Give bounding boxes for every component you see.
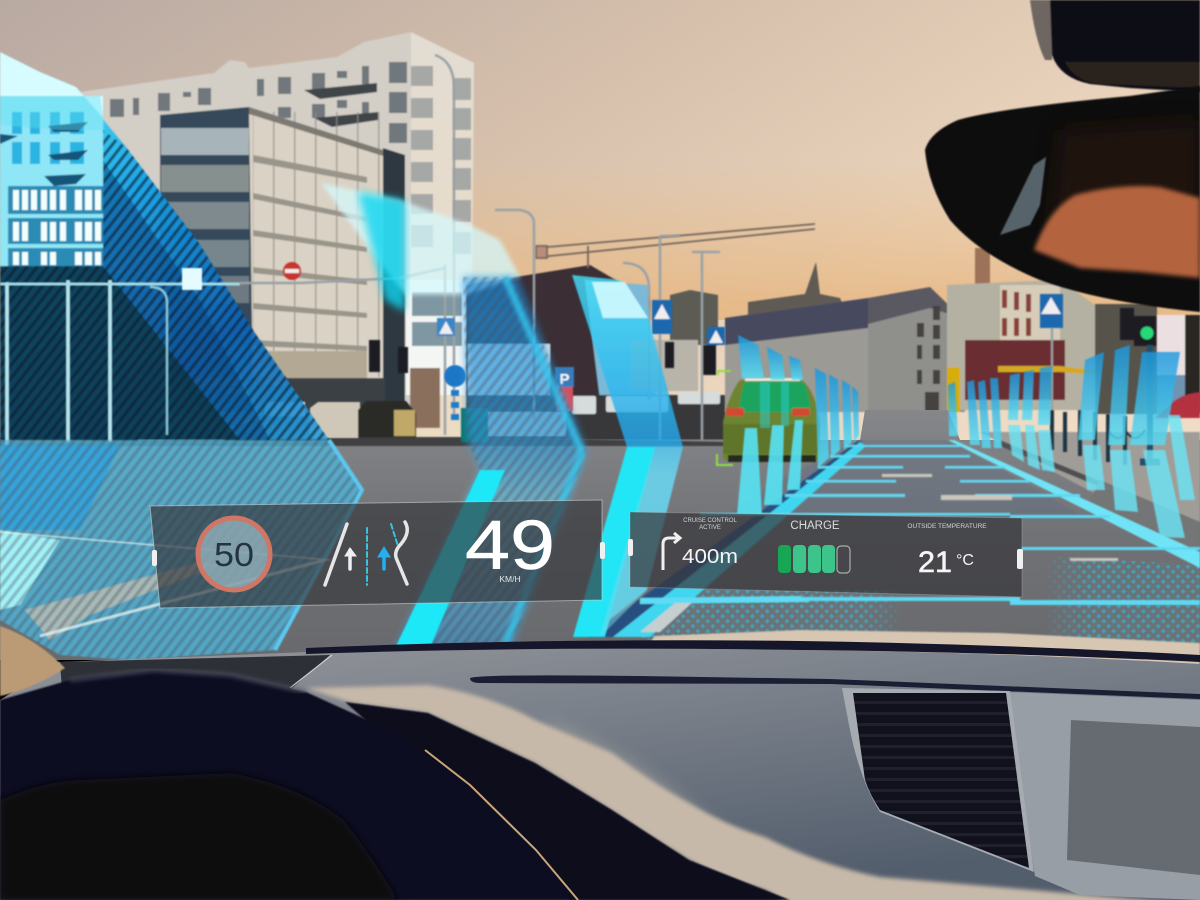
speed readout: 49 [465,506,555,584]
mirror body [925,86,1200,312]
mirror reflection: driver [1034,186,1200,278]
billboard [631,340,698,391]
hatched road at the base of the windscreen [640,556,1200,650]
windscreen base strip [640,630,1200,665]
temperature readout: °C [956,552,974,569]
hologram: guide pillars along right kerb [948,345,1195,538]
temperature readout: 21 [918,546,952,579]
building: apartment block on right [947,248,1200,415]
lane edge: dark outer band [587,441,863,637]
car: gold estate [358,401,416,438]
bollards and chain [1052,410,1145,465]
seam line [290,655,332,688]
green signal [1140,326,1154,340]
road centre dashes [882,474,1118,561]
street lamps, signal poles and signs [240,55,1200,465]
lane edge: cyan left [613,442,866,637]
cruise control label: CRUISE CONTROL [683,518,737,524]
cruise control label: ACTIVE [699,525,721,531]
lead vehicle with green tracking overlay [717,371,820,465]
hand on wheel [0,626,65,696]
traffic lights [369,308,1156,375]
dark area below sweep [345,702,790,900]
rear-view mirror [925,0,1200,312]
ground behind the junction [466,395,726,440]
parking sign [555,367,574,411]
distance readout: 400m [682,546,738,568]
temperature label: OUTSIDE TEMPERATURE [907,523,987,530]
charge label: CHARGE [790,520,840,532]
lane edge: cyan right [948,440,1200,568]
cruise control label [683,518,737,531]
mirror mount [1030,0,1200,92]
air vent [853,693,1029,868]
wheel hub [0,773,398,900]
car: white van [310,402,360,438]
pedestrian sign: right [1040,294,1063,328]
battery gauge [778,545,850,573]
gantry poles seen through hologram [0,268,240,445]
tracking bracket [717,371,733,465]
mirror reflection: building [1000,157,1046,235]
beige glow on dashboard [540,725,720,850]
city skyline and buildings [80,32,1200,440]
steering wheel [0,670,578,900]
dashboard lower-left shadow [60,655,330,695]
icon: speed limit 50 [198,518,270,590]
building: distant hall [670,262,965,412]
navy lower block [0,266,240,440]
hologram: left sweep above the kerb [0,52,329,440]
no-entry sign [283,262,301,280]
hologram: guide pillars beside lead vehicle [737,335,859,515]
car: silver saloon [138,411,224,440]
car: black SUV with white roof [236,403,312,441]
building: white tower [80,32,474,440]
background: evening sky [0,0,1200,660]
beige dashboard sweep [306,685,1200,900]
temperature readout [918,546,974,579]
building: white annexe [468,344,550,406]
diagonal hatching [0,130,329,440]
blue keep-right sign [444,365,466,387]
icon: speed limit 50: 50 [214,536,254,573]
pedestrian sign: left [437,318,455,336]
buses [572,392,720,414]
blue marker posts [451,390,459,420]
pedestrian sign: centre [652,300,672,334]
road markings seen through left hologram [0,532,330,636]
connector tabs [628,539,1023,569]
HUD panel: speed and lane [150,500,605,608]
street bin [461,408,488,442]
speed readout: KM/H [499,574,521,584]
building: dark brick block [466,265,650,405]
pedestrian sign: second [707,327,725,345]
projected lane on the road [587,440,1200,637]
icon: turn right arrow [663,533,680,570]
dashboard slit [470,675,1200,699]
mirror interior shade [1050,120,1200,250]
yellow roadside board [947,367,960,412]
building: glass office block [160,107,405,420]
lane crossbars [700,445,1200,605]
wheel rim highlight [70,670,306,692]
dashboard top [0,648,1200,900]
hologram: centre chevron [321,183,587,648]
air vent surround [842,688,1034,872]
wheel edge highlight [425,750,578,900]
connector tabs [152,542,605,566]
red car on far right [1155,392,1200,418]
car: dark saloon [92,414,165,442]
crane [536,224,815,268]
HUD panel: navigation, charge and temperature [628,512,1023,597]
parked cars, left [92,401,488,442]
hologram: second chevron [572,275,683,637]
centre console screen [1067,720,1200,875]
building: cyan tinted block behind sign [585,280,655,400]
centre console frame [1006,692,1200,900]
road surface [0,410,1200,660]
far kerb and pavement [0,432,1200,562]
hologram: left sweep over the road [0,440,362,660]
icon: lane assist [325,522,407,585]
dark windscreen seal [306,640,1200,662]
reflected beige dash in glass [25,562,220,640]
car interior [0,626,1200,900]
left facade with windows [0,96,103,268]
parking sign: P [559,371,570,388]
